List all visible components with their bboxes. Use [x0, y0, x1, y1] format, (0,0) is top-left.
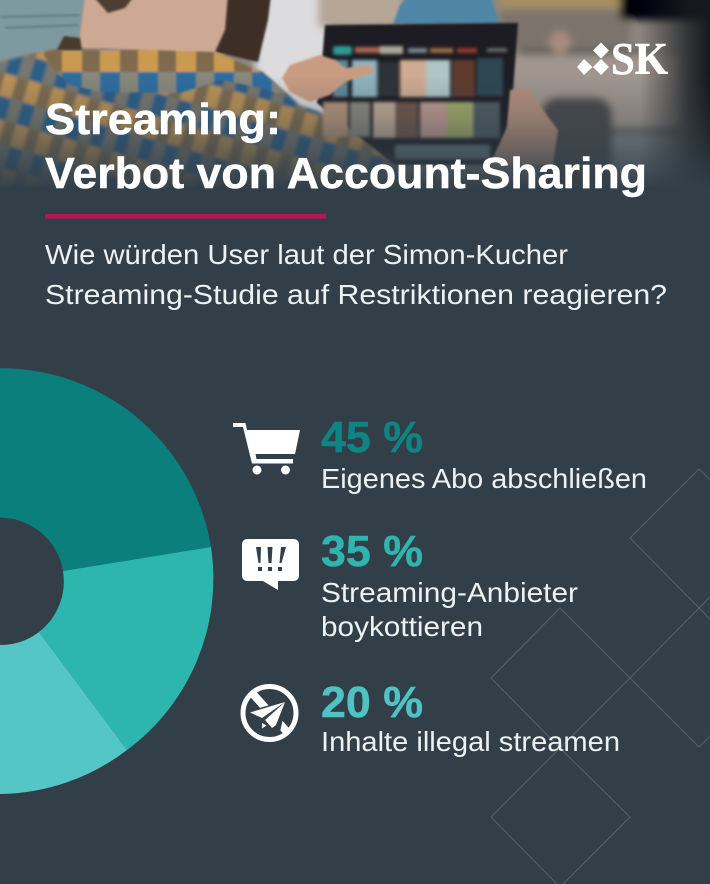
stat: 45 %: Eigenes Abo abschließen: [321, 463, 647, 494]
header photo: person with tablet: [0, 0, 710, 184]
sofa left: [0, 0, 85, 62]
stat: 45 %: 45 %: [321, 413, 423, 462]
photo fade to background: [0, 84, 710, 215]
stat: 45 %: [321, 413, 647, 494]
stat: 20 %: [321, 678, 620, 757]
subtitle: Wie würden User laut der Simon-Kucher: [45, 239, 568, 270]
stat: 35 %: [321, 527, 578, 642]
donut chart: [0, 368, 213, 794]
neck: [78, 0, 235, 55]
title: Streaming:: [45, 95, 281, 144]
subtitle: [45, 239, 667, 310]
logo: SK: SK: [611, 34, 668, 84]
slice: 35 %: [39, 547, 213, 750]
stat: 35 %: 35 %: [321, 527, 423, 576]
icon: crossed-out paper plane: [243, 686, 296, 740]
stat: 20 %: Inhalte illegal streamen: [321, 726, 620, 757]
stat: 35 %: Streaming-Anbieter: [321, 577, 578, 608]
right edge shadow: [644, 0, 710, 183]
hands: [282, 55, 375, 102]
collar: [42, 48, 290, 97]
title: Verbot von Account-Sharing: [45, 149, 647, 198]
subtitle: Streaming-Studie auf Restriktionen reagieren?: [45, 279, 667, 310]
background diamonds: [491, 469, 710, 884]
stat: 35 %: boykottieren: [321, 611, 483, 642]
logo: SK: [577, 34, 668, 84]
accent rule: [45, 214, 326, 218]
slice: 20 %: [0, 632, 127, 794]
blue garment behind tablet: [393, 0, 500, 24]
tablet: [317, 23, 518, 165]
icon: shopping cart: [233, 423, 300, 474]
title: [45, 95, 647, 198]
shirt body: [0, 50, 398, 182]
icon: speech bubble with exclamation marks: [242, 539, 299, 590]
slice: 45 %: [0, 368, 211, 571]
beard: [215, 0, 271, 62]
tablet thumbnails: [323, 46, 507, 159]
stat: 20 %: 20 %: [321, 678, 423, 727]
